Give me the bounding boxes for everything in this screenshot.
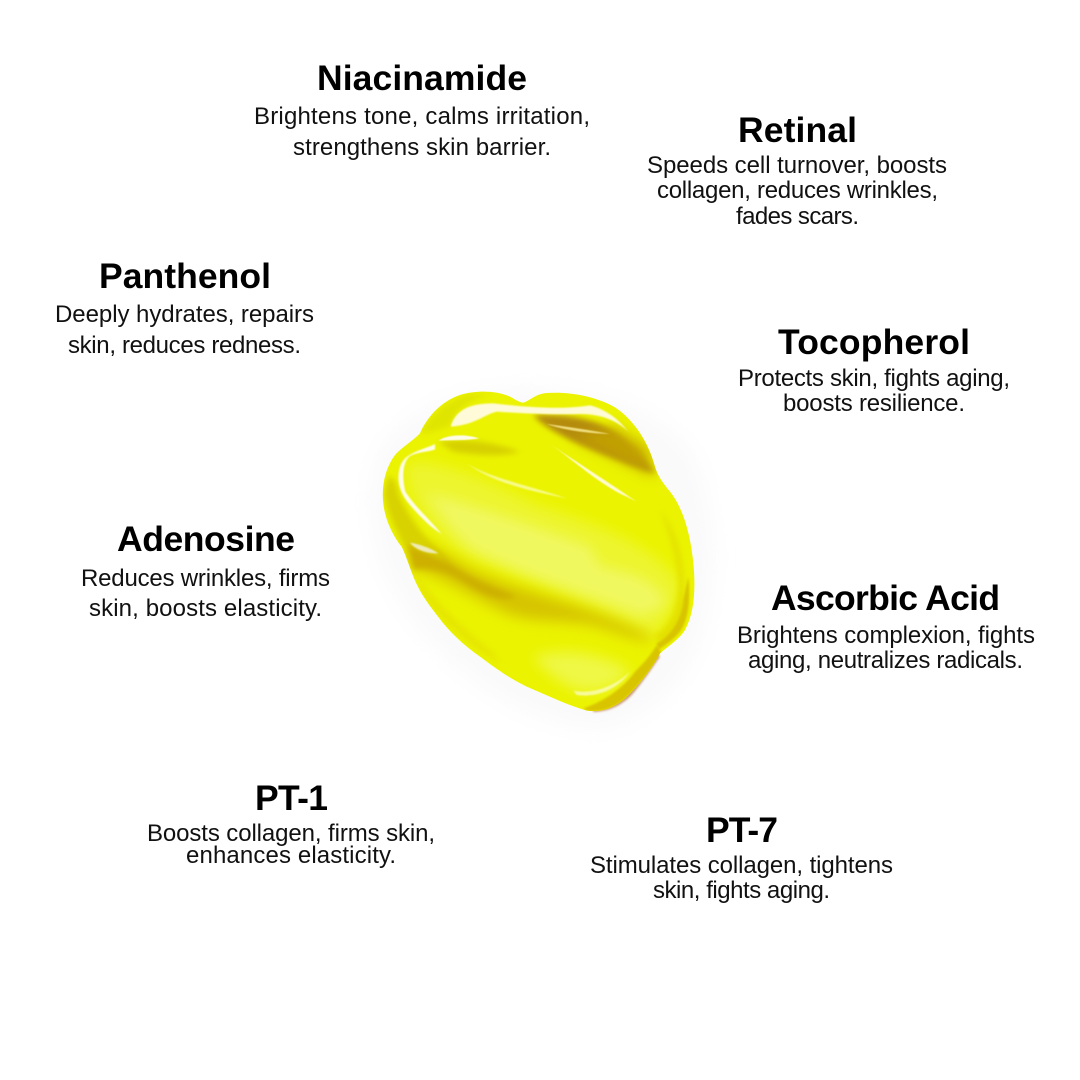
text block: Tocopherol xyxy=(738,322,1010,417)
description: Ascorbic Acid: Brightens complexion, fights xyxy=(737,622,1035,649)
description: Tocopherol: boosts resilience. xyxy=(783,390,965,417)
heading: Adenosine: Adenosine xyxy=(117,519,295,559)
description: Adenosine: skin, boosts elasticity. xyxy=(89,595,322,622)
description: PT-7: Stimulates collagen, tightens xyxy=(590,852,893,879)
description: Niacinamide: Brightens tone, calms irritation, xyxy=(254,103,590,130)
heading: PT-7: PT-7 xyxy=(706,810,778,850)
heading: Tocopherol: Tocopherol xyxy=(778,322,970,362)
description: Adenosine xyxy=(81,565,330,622)
description: Panthenol xyxy=(55,301,314,359)
heading: Niacinamide: Niacinamide xyxy=(317,58,527,98)
heading: Ascorbic Acid: Ascorbic Acid xyxy=(771,578,1000,618)
text block: PT-7 xyxy=(590,810,893,904)
description: Retinal xyxy=(647,152,947,230)
description: Ascorbic Acid: aging, neutralizes radicals. xyxy=(748,647,1023,674)
description: Niacinamide: strengthens skin barrier. xyxy=(293,134,551,161)
description: Tocopherol: Protects skin, fights aging, xyxy=(738,365,1010,392)
cream swatch xyxy=(382,392,694,714)
heading: PT-1: PT-1 xyxy=(255,778,328,818)
text block: Ascorbic Acid xyxy=(737,578,1035,674)
text block: Niacinamide xyxy=(254,58,590,161)
description: PT-1 xyxy=(147,820,435,869)
text block: Adenosine xyxy=(81,519,330,622)
description: Panthenol: skin, reduces redness. xyxy=(68,332,301,359)
text block: PT-1 xyxy=(147,778,435,869)
description: Retinal: Speeds cell turnover, boosts xyxy=(647,152,947,179)
description: PT-7 xyxy=(590,852,893,904)
description: Niacinamide xyxy=(254,103,590,161)
description: Panthenol: Deeply hydrates, repairs xyxy=(55,301,314,328)
text block: Panthenol xyxy=(55,256,314,359)
text block: Retinal xyxy=(647,110,947,230)
description: PT-1: enhances elasticity. xyxy=(186,842,396,869)
description: PT-1: Boosts collagen, firms skin, xyxy=(147,820,435,847)
description: PT-7: skin, fights aging. xyxy=(653,877,830,904)
description: Retinal: fades scars. xyxy=(736,203,859,230)
heading: Panthenol: Panthenol xyxy=(99,256,271,296)
heading: Retinal: Retinal xyxy=(738,110,857,150)
description: Retinal: collagen, reduces wrinkles, xyxy=(657,177,938,204)
description: Ascorbic Acid xyxy=(737,622,1035,674)
description: Adenosine: Reduces wrinkles, firms xyxy=(81,565,330,592)
highlights xyxy=(451,403,628,432)
description: Tocopherol xyxy=(738,365,1010,417)
